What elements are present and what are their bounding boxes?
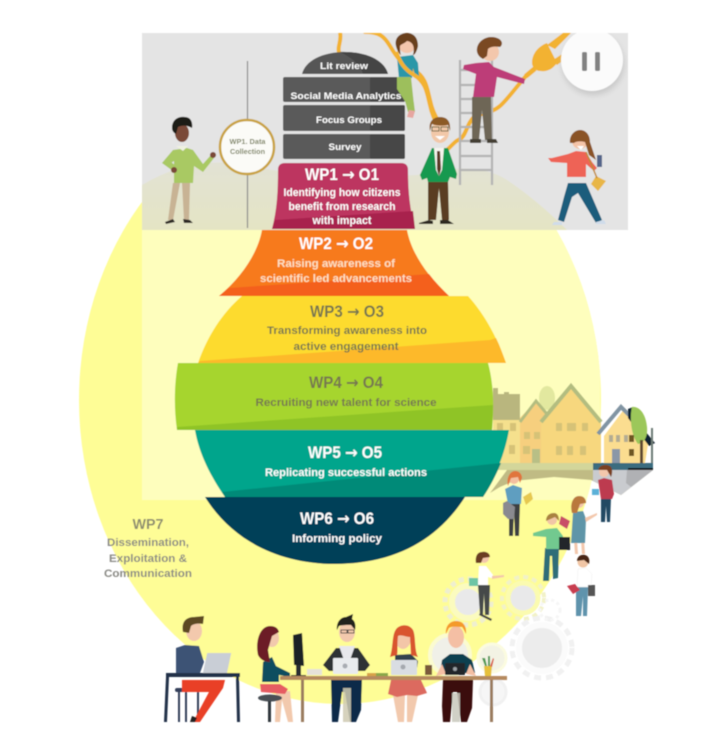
pale yellow background rectangle [142, 230, 600, 500]
WP7 label: Communication [104, 568, 192, 580]
badge: WP1 data collection [220, 120, 274, 174]
band: WP5: Replicating successful actions [265, 467, 427, 479]
grey top panel [142, 29, 628, 230]
figure: man on ladder [463, 37, 525, 143]
person: woman in blue dress [559, 496, 597, 554]
figure: woman with bag [548, 130, 606, 225]
social media analytics block: Social Media Analytics [290, 91, 402, 102]
team at desks [164, 614, 507, 722]
band: WP3: WP3 → O3 [310, 302, 384, 321]
person: woman in white top [469, 552, 504, 621]
person: woman with red hair [388, 625, 427, 722]
band: WP3: Transforming awareness into [267, 325, 427, 337]
icon: plug [524, 33, 576, 78]
figure: man in green sweater [162, 117, 216, 224]
long desk [280, 676, 507, 722]
band: WP1 [272, 163, 415, 229]
yellow bulb background ellipse [79, 96, 601, 704]
badge: WP1 data collection: WP1. Data [230, 139, 266, 146]
band: WP1: Identifying how citizens [284, 187, 400, 199]
band: WP2: scientific led advancements [260, 273, 412, 285]
badge: WP1 data collection: Collection [230, 149, 265, 156]
band: WP2: WP2 → O2 [299, 234, 373, 253]
left desk [164, 673, 240, 722]
person: man in green top [533, 513, 570, 581]
survey block: Survey [328, 142, 362, 153]
band: WP1: with impact [312, 215, 372, 227]
band: WP6: WP6 → O6 [300, 509, 374, 528]
band: WP3: active engagement [294, 341, 399, 353]
data collection stack [283, 52, 405, 159]
band: WP1: benefit from research [288, 201, 396, 213]
person: man with red book [567, 555, 595, 616]
figure: man with green jacket [419, 117, 457, 224]
vertical data collection line [246, 61, 248, 228]
gears [430, 577, 572, 705]
castle and houses [493, 386, 601, 463]
person: woman in red top [592, 465, 614, 522]
band: WP4: WP4 → O4 [309, 373, 384, 392]
figure: woman legs over stack [397, 77, 414, 109]
lit review block: Lit review [320, 61, 369, 72]
cables [339, 32, 526, 149]
band: WP5 [195, 430, 509, 497]
band: WP4: Recruiting new talent for science [256, 397, 436, 409]
focus groups block: Focus Groups [316, 115, 382, 126]
WP7 label: Exploitation & [109, 553, 187, 565]
icon: pause button [561, 29, 624, 95]
town illustration [490, 386, 655, 495]
person: man with orange hair [436, 621, 476, 722]
laptops [333, 658, 465, 675]
street and shadow [490, 463, 653, 495]
band: WP4 [175, 363, 493, 430]
people walking [469, 465, 614, 621]
person: man with glasses [323, 614, 370, 722]
ladder [460, 60, 492, 185]
person: woman at computer [257, 626, 293, 722]
band: WP6 [205, 497, 465, 564]
figure: woman sitting on stack [396, 33, 419, 118]
band: WP2: Raising awareness of [277, 258, 395, 270]
band: WP5: WP5 → O5 [308, 443, 382, 462]
icon: desktop monitor [291, 633, 322, 677]
ground hills [142, 162, 567, 230]
desk items [367, 656, 494, 676]
band: WP2 [219, 230, 449, 296]
house with tree [598, 407, 655, 464]
WP7 label: WP7 [132, 516, 164, 533]
person: man at left desk [175, 616, 231, 722]
WP7 label [104, 516, 192, 580]
WP7 label: Dissemination, [107, 537, 189, 549]
cable overlay [396, 50, 436, 120]
band: WP3 [198, 296, 506, 363]
band: WP1: WP1 → O1 [305, 165, 379, 184]
band: WP6: Informing policy [292, 533, 383, 545]
person: orange-haired woman [503, 471, 533, 536]
